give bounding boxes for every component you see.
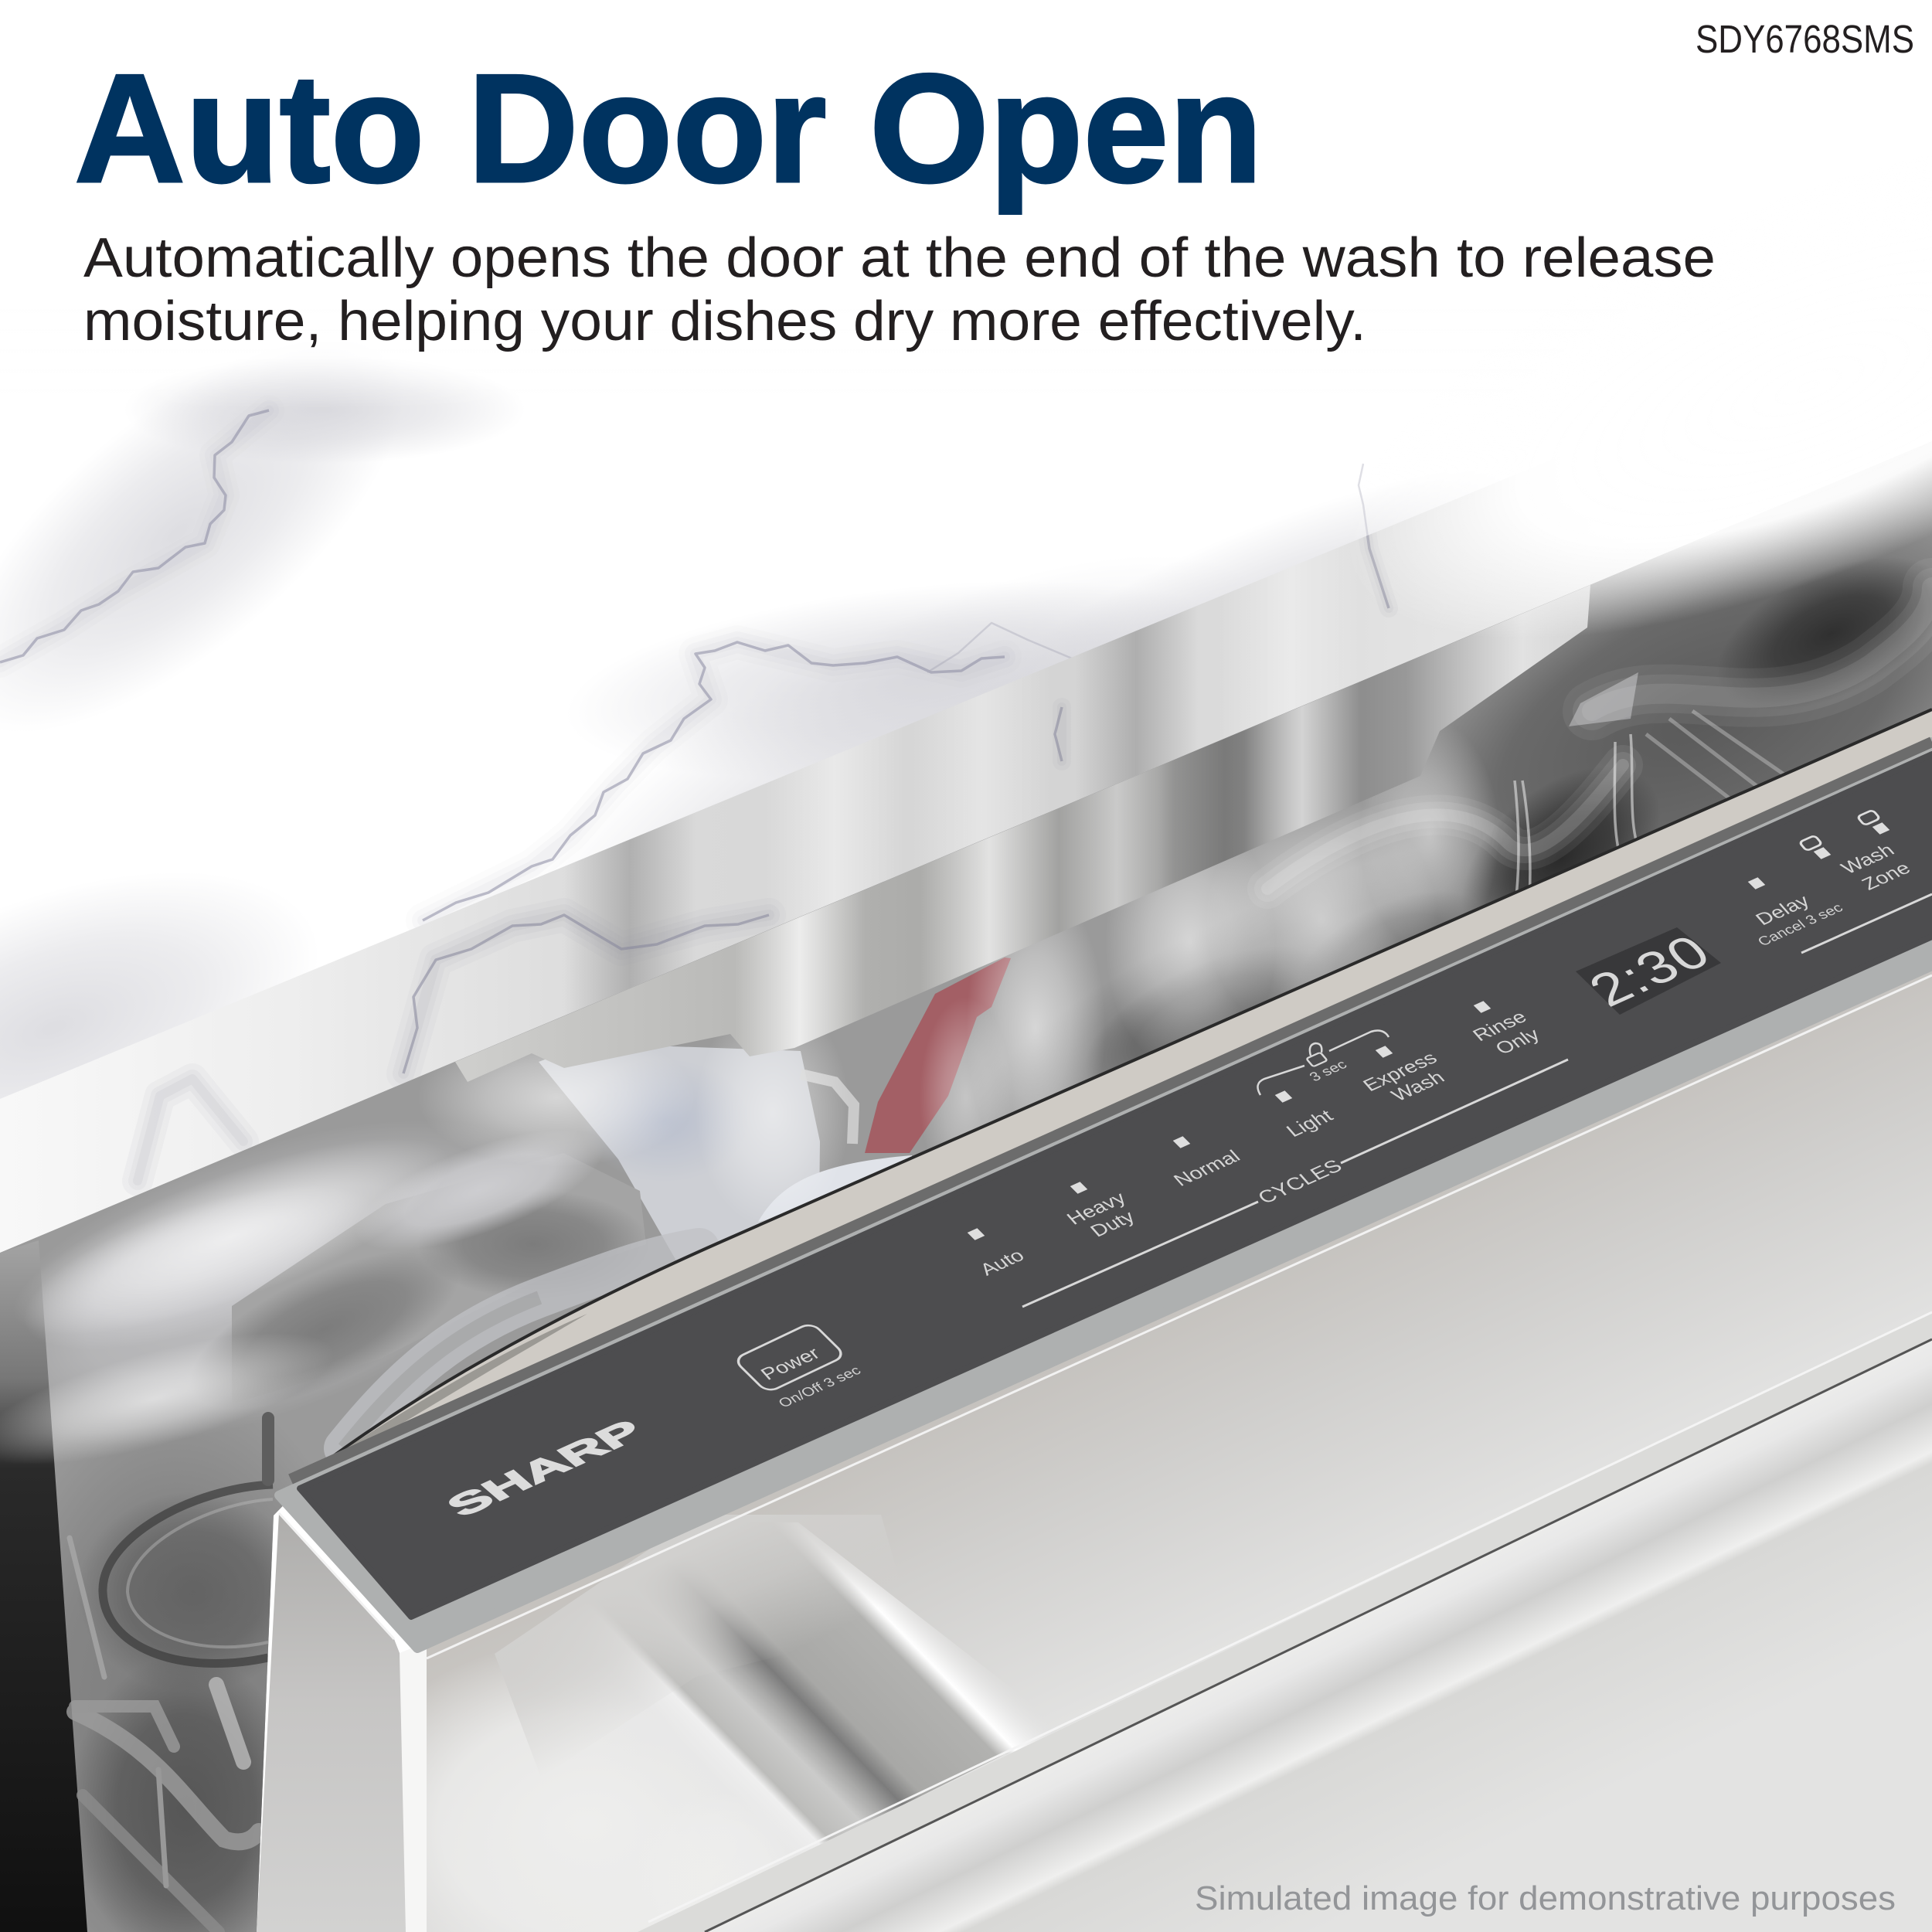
label: 3 sec: 3 sec — [1307, 1058, 1351, 1084]
top bevel — [291, 742, 1932, 1479]
counter front edge band — [0, 502, 1598, 1240]
door: handle frame — [638, 1312, 1932, 1932]
description text — [83, 227, 1716, 352]
brand logo: SHARP — [438, 1414, 651, 1522]
icon: wash zone upper — [1799, 810, 1880, 851]
interior: left lower rack zone — [0, 1053, 598, 1932]
interior: right rack zone — [944, 407, 1932, 1199]
interior: rack post — [262, 1418, 274, 1480]
power button — [733, 1322, 845, 1393]
top right haze over counter and interior — [1281, 29, 1932, 743]
interior: jug handle — [801, 1074, 854, 1144]
door: main face — [427, 966, 1932, 1932]
door: frame top highlight — [648, 1312, 1932, 1922]
label: Light: Light — [1283, 1107, 1337, 1141]
description text: Automatically opens the door at the end of the wash to release — [83, 227, 1716, 289]
power label: Power — [757, 1344, 825, 1384]
indicator squares — [968, 822, 1889, 1240]
door: lower handle and panel — [705, 1339, 1932, 1932]
stainless door front — [257, 966, 1932, 1932]
label: CYCLES with rule: CYCLES — [1253, 1155, 1346, 1208]
door top strip with gasket curve — [301, 709, 1932, 1488]
label: Wash Zone — [1837, 841, 1915, 894]
top haze fading marble into white — [0, 309, 1932, 410]
label: Wash Zone: Zone — [1858, 859, 1915, 894]
interior: jug shading — [611, 1085, 711, 1158]
label: Normal: Normal — [1170, 1147, 1244, 1190]
interior: big plate — [232, 1165, 645, 1355]
interior: rack tubes — [70, 1538, 259, 1932]
interior: pale dish on the left — [36, 1218, 331, 1335]
interior: side plate — [758, 1155, 912, 1222]
label: Rinse Only: Rinse — [1469, 1008, 1531, 1045]
digital display: 2:30 — [1577, 925, 1721, 1016]
label: Rinse Only — [1469, 1008, 1544, 1058]
control panel face — [300, 754, 1932, 1617]
label: Delay: Delay — [1752, 892, 1814, 929]
label: Cancel 3 sec: Cancel 3 sec — [1755, 901, 1847, 949]
icon: lock — [1306, 1043, 1328, 1066]
lock bracket — [1257, 1031, 1389, 1095]
marble countertop surface — [0, 266, 1642, 1247]
interior: red utensil — [865, 957, 1011, 1153]
door: vertical highlight — [400, 1642, 427, 1932]
panel: controls and labels — [438, 810, 1932, 1522]
interior: plate rim arc — [344, 1248, 699, 1448]
door: handle pocket — [340, 1515, 1082, 1932]
interior: far-left dark wall — [0, 1240, 87, 1932]
footnote: Simulated image for demonstrative purposes — [1195, 1879, 1896, 1917]
door: left column — [257, 1513, 427, 1932]
interior: plate shading — [168, 1105, 649, 1440]
description text: moisture, helping your dishes dry more effectively. — [83, 291, 1366, 352]
title: Auto Door Open — [74, 43, 1263, 215]
steam: wisps — [1267, 587, 1932, 889]
control panel rim — [279, 742, 1932, 1648]
gray band: door shadow overlay with steam streaks — [386, 541, 1700, 1159]
label: Wash Zone: Wash — [1837, 841, 1899, 878]
dishwasher interior with dishes and steam — [0, 386, 1932, 1932]
label: Heavy Duty: Duty — [1087, 1208, 1139, 1240]
label: Rinse Only: Only — [1492, 1026, 1544, 1058]
label: Heavy Duty: Heavy — [1063, 1189, 1131, 1229]
rim highlight — [279, 975, 1932, 1658]
steam: soft white plumes — [0, 719, 1499, 1492]
power sub label: On/Off 3 sec — [775, 1363, 865, 1410]
label: Express Wash: Express — [1359, 1049, 1441, 1095]
label: Auto: Auto — [976, 1247, 1029, 1279]
label: Express Wash: Wash — [1387, 1068, 1449, 1105]
interior: jug — [539, 1043, 820, 1267]
door: shadow line — [705, 1339, 1932, 1932]
panel rule right — [1801, 894, 1932, 953]
interior: glass rim — [103, 1485, 273, 1663]
label: CYCLES with rule — [1022, 1060, 1568, 1307]
label: Heavy Duty — [1063, 1189, 1139, 1240]
